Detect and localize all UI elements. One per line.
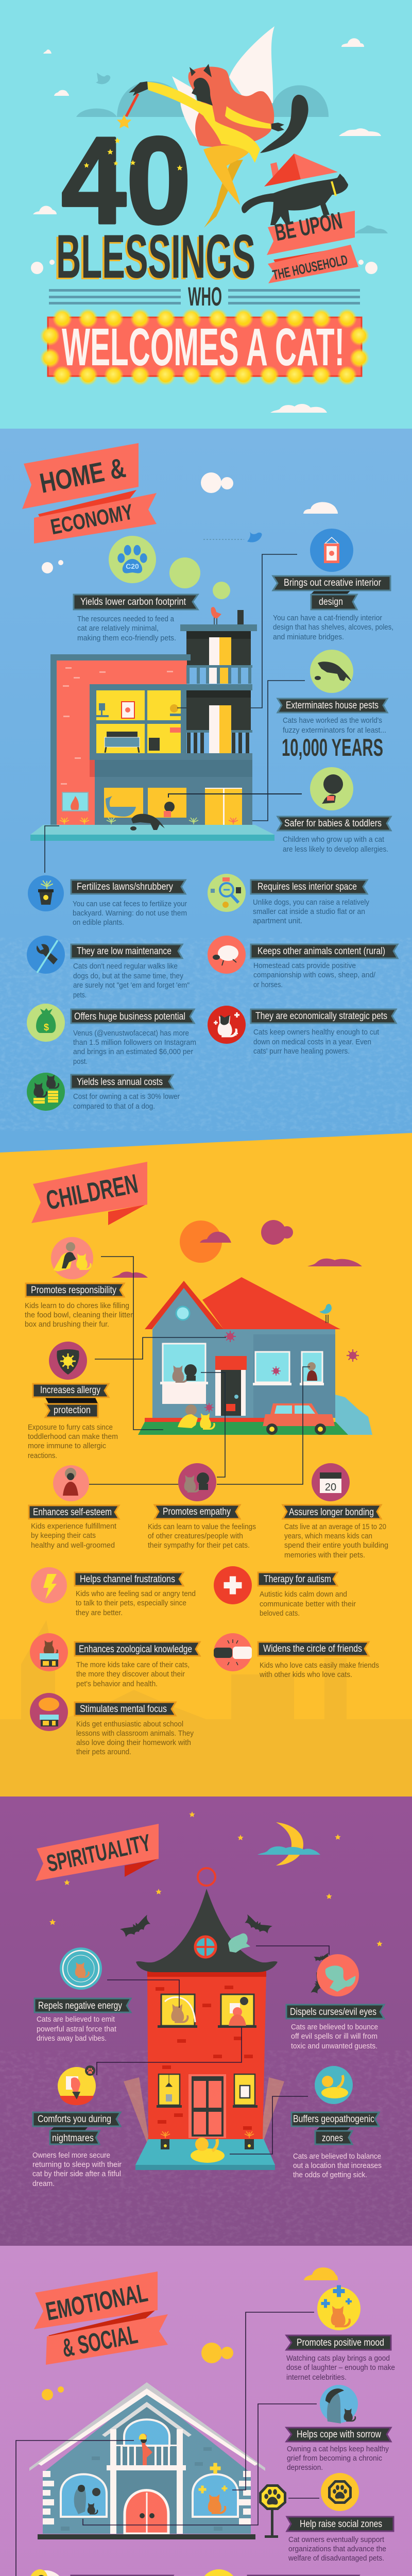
cloud <box>270 404 327 413</box>
label: Enhances zoological knowledge <box>79 1644 192 1655</box>
text: than 1.5 million followers on Instagram <box>73 1039 196 1047</box>
icon: cat on books <box>30 1633 68 1671</box>
item: negative energy <box>35 1947 131 2043</box>
item: other animals <box>208 936 398 989</box>
label <box>35 1998 131 2012</box>
text <box>73 962 190 999</box>
night sky <box>49 1811 383 1995</box>
text: also love doing their homework with <box>76 1739 191 1747</box>
text <box>287 2445 389 2472</box>
text: beloved cats. <box>260 1609 300 1618</box>
ribbon: be upon the household <box>267 207 358 283</box>
street sign <box>259 2484 286 2538</box>
item: longer bonding <box>283 1463 388 1560</box>
text: spend their entire youth building <box>284 1541 388 1550</box>
text: Autistic kids calm down and <box>260 1590 347 1599</box>
label: Comforts you during <box>38 2114 111 2125</box>
text: memories with their pets. <box>284 1551 365 1560</box>
label: Keeps other animals content (rural) <box>258 946 385 957</box>
text: Cat owners eventually support <box>288 2536 384 2544</box>
text <box>73 1093 180 1111</box>
label: Buffers geopathogenic <box>293 2114 374 2125</box>
marquee sign <box>40 309 369 385</box>
label: protection <box>54 1405 91 1416</box>
label: Assures longer bonding <box>289 1507 374 1518</box>
text: You can use cat feces to fertilize your <box>73 900 187 908</box>
text: off evil spells or ill will from <box>291 2032 377 2041</box>
text <box>260 1590 356 1618</box>
text <box>253 899 370 925</box>
item: autism <box>214 1566 356 1618</box>
text: Cats are believed to bounce <box>291 2023 378 2031</box>
item: geopathogenic <box>291 2066 382 2179</box>
text: Watching cats play brings a good <box>286 2354 390 2363</box>
text and stat <box>282 717 386 761</box>
text and stat: fuzzy exterminators for at least... <box>283 726 386 735</box>
label <box>71 1075 173 1089</box>
heading ribbon: ECONOMY <box>48 499 135 539</box>
item: self-esteem <box>29 1465 119 1550</box>
decorative blobs and clouds <box>42 472 338 599</box>
label <box>74 595 198 609</box>
text: Kids who are feeling sad or angry tend <box>76 1590 196 1598</box>
heading ribbon: EMOTIONAL <box>43 2278 150 2326</box>
text: they are better. <box>76 1609 123 1617</box>
sun and clouds <box>112 1220 362 1278</box>
text: apartment unit. <box>253 917 302 925</box>
icon: cat pouncing <box>310 650 353 693</box>
text: Cats don't need regular walks like <box>73 962 178 971</box>
icon: siamese cat <box>208 1006 246 1044</box>
text: toddlerhood can make them <box>28 1433 118 1441</box>
fairy cat <box>117 26 308 228</box>
label: Widens the circle of friends <box>263 1643 362 1654</box>
haunted house <box>124 1868 284 2170</box>
label: zones <box>322 2133 343 2144</box>
text: grief from becoming a chronic <box>287 2454 382 2463</box>
text <box>73 1029 196 1066</box>
label <box>75 1642 200 1656</box>
text: and brings in an estimated $6,000 per <box>73 1048 193 1056</box>
text: Cats are believed to emit <box>37 2015 115 2024</box>
label: Exterminates house pests <box>286 700 379 711</box>
WHO with rules: WHO <box>188 282 222 311</box>
label: Yields lower carbon footprint <box>80 597 186 607</box>
item: annual costs <box>27 1073 180 1111</box>
text: cats' purr have healing powers. <box>253 1047 350 1056</box>
icon: calendar 20: 20 <box>325 1482 336 1493</box>
icon: shield virus <box>49 1342 87 1380</box>
label <box>251 1009 396 1023</box>
label: Stimulates mental focus <box>80 1704 167 1715</box>
text: Cats are believed to balance <box>293 2153 381 2161</box>
text: are less likely to develop allergies. <box>283 845 388 854</box>
text: depression. <box>287 2464 323 2472</box>
text: The more kids take care of their cats, <box>76 1661 190 1669</box>
text: their sympathy for their pet cats. <box>148 1541 250 1550</box>
text: powerful astral force that <box>37 2025 116 2033</box>
item: business potential <box>27 1004 196 1066</box>
item: stress <box>200 2569 372 2576</box>
text <box>77 615 176 642</box>
text: internet celebrities. <box>286 2374 347 2382</box>
icon: lightning bolt <box>31 1567 67 1603</box>
blobs and cloud <box>42 2267 338 2400</box>
text: Venus (@venustwofacecat) has more <box>73 1029 189 1038</box>
icon: coins with cat and dog <box>27 1073 65 1111</box>
text <box>259 1662 379 1679</box>
item: positive mood <box>286 2285 395 2382</box>
label <box>33 1384 109 1417</box>
text: companionship with cows, sheep, and/ <box>253 971 376 979</box>
text: are surely not "get 'em and forget 'em" <box>73 981 190 990</box>
label: nightmares <box>52 2133 94 2144</box>
text: Children who grow up with a cat <box>283 836 384 844</box>
label: design <box>319 597 343 607</box>
icon: cat in rings <box>60 1947 102 1990</box>
label: They are economically strategic pets <box>255 1011 387 1022</box>
panel: spirituality <box>32 1811 384 2188</box>
text: box and brushing their fur. <box>25 1320 109 1329</box>
item: mental focus <box>30 1693 194 1756</box>
label: Offers huge business potential <box>74 1011 185 1022</box>
label <box>291 2112 379 2144</box>
heading ribbon <box>31 1162 147 1225</box>
text: communicate better with their <box>260 1600 356 1608</box>
connector lines <box>89 1257 310 1484</box>
label: Promotes responsibility <box>31 1285 116 1296</box>
label <box>273 576 390 609</box>
connector lines <box>45 554 305 873</box>
label: Help raise social zones <box>300 2519 382 2530</box>
item: low maintenance <box>27 936 190 999</box>
sky clouds <box>33 38 381 214</box>
icon: baby <box>310 767 353 810</box>
item: responsibility <box>25 1237 133 1329</box>
text: reactions. <box>28 1452 57 1460</box>
item: circle of friends <box>214 1633 379 1679</box>
text: toxic and unwanted guests. <box>291 2042 377 2050</box>
text: on edible plants. <box>73 919 124 927</box>
text <box>273 614 393 641</box>
white dots <box>31 260 377 274</box>
text <box>32 2151 122 2188</box>
text: Unlike dogs, you can raise a relatively <box>253 899 370 907</box>
item: curses <box>286 1954 384 2050</box>
text: pets. <box>73 991 87 999</box>
icon: medical cross <box>214 1566 252 1604</box>
label: Promotes empathy <box>163 1506 231 1517</box>
label: Dispels curses/evil eyes <box>290 2007 376 2018</box>
heading ribbon: & SOCIAL <box>60 2320 140 2363</box>
icon: girl and cat <box>51 1237 93 1279</box>
text: compared to that of a dog. <box>73 1103 155 1111</box>
text: Kids who love cats easily make friends <box>260 1662 379 1670</box>
text: drives away bad vibes. <box>37 2035 107 2043</box>
text: Cost for owning a cat is 30% lower <box>73 1093 180 1101</box>
text: the more they discover about their <box>76 1670 185 1679</box>
text: The resources needed to feed a <box>77 615 175 623</box>
text <box>37 2015 116 2043</box>
text: of other creatures/people with <box>148 1532 243 1540</box>
text: organizations that advance the <box>288 2545 386 2553</box>
icon: money bag <box>27 1004 65 1042</box>
text: or horses. <box>253 981 283 989</box>
label <box>286 2428 391 2442</box>
icon: kid with cat <box>178 1463 216 1501</box>
text: cat are relatively minimal, <box>77 624 159 633</box>
text <box>291 2023 378 2050</box>
item: babies and toddlers <box>278 767 391 854</box>
label <box>71 2575 173 2576</box>
label <box>258 1572 337 1586</box>
building <box>30 607 274 841</box>
house <box>138 1277 372 1435</box>
text <box>288 2536 386 2563</box>
text: Owners feel more secure <box>32 2151 110 2160</box>
text <box>76 1590 196 1617</box>
label: Increases allergy <box>40 1385 100 1396</box>
text <box>25 1302 133 1329</box>
label: Yields less annual costs <box>77 1077 163 1088</box>
text: Kids experience fulfillment <box>31 1522 116 1531</box>
magic stars <box>84 138 183 171</box>
label: Repels negative energy <box>38 2001 122 2011</box>
text and stat: Cats have worked as the world's <box>283 717 382 725</box>
panel: children <box>0 1162 412 1797</box>
icon: paw octagon <box>321 2473 359 2511</box>
text: more immune to allergic <box>28 1442 106 1450</box>
text: the odds of getting sick. <box>293 2171 367 2179</box>
item: empathy <box>148 1463 256 1550</box>
icon: calendar 20 <box>312 1463 350 1501</box>
text <box>253 962 376 989</box>
label: They are low maintenance <box>77 946 171 957</box>
text <box>28 1423 118 1460</box>
icon: picture frame <box>310 529 353 572</box>
text <box>76 1720 194 1756</box>
label <box>154 1505 240 1519</box>
text: dream. <box>32 2180 55 2188</box>
label <box>71 944 182 958</box>
text <box>253 1028 379 1056</box>
label <box>278 817 391 831</box>
text: You can have a cat-friendly interior <box>273 614 382 622</box>
text: Owning a cat helps keep healthy <box>287 2445 389 2453</box>
text: pet's behavior and health. <box>76 1680 158 1688</box>
label: Requires less interior space <box>258 882 357 892</box>
label: Brings out creative interior <box>284 578 382 588</box>
text: returning to sleep with their <box>32 2161 122 2169</box>
text <box>286 2354 395 2382</box>
text: smaller cat inside a studio flat or an <box>253 908 365 916</box>
icon: plant pot <box>28 875 64 911</box>
text: down on medical costs in a year. Even <box>253 1038 371 1046</box>
icon: woman holding cat <box>27 2569 65 2576</box>
icon: magnifier <box>208 874 246 912</box>
text: backyard. Warning: do not use them <box>73 909 187 918</box>
text: with other kids who love cats. <box>259 1671 352 1679</box>
item: lower carbon footprint <box>74 536 198 642</box>
label: Promotes positive mood <box>297 2337 384 2348</box>
label: Therapy for autism <box>264 1574 331 1585</box>
ribbon: be upon the household: BE UPON <box>272 207 345 246</box>
text <box>73 900 187 927</box>
icon: paw circle <box>109 536 156 583</box>
text: lessons with classroom animals. They <box>76 1730 194 1738</box>
title BLESSINGS <box>54 222 255 293</box>
item: sorrow <box>286 2385 391 2472</box>
heading ribbon <box>34 2272 168 2365</box>
item: creative interior design <box>273 529 393 641</box>
text: to talk to their pets, especially since <box>76 1599 186 1607</box>
text: and miniature bridges. <box>273 633 344 641</box>
text: Homestead cats provide positive <box>253 962 356 970</box>
item: less interior space <box>208 874 370 925</box>
text: making them eco-friendly pets. <box>77 634 176 642</box>
label <box>278 699 387 713</box>
text <box>284 1523 388 1560</box>
label <box>251 944 398 958</box>
label: Safer for babies & toddlers <box>284 818 382 829</box>
text: the food bowl, cleaning their litter <box>25 1311 133 1319</box>
label: Helps cope with sorrow <box>297 2429 381 2440</box>
heading ribbon <box>36 1824 159 1881</box>
label: Enhances self-esteem <box>33 1507 112 1518</box>
house <box>29 2382 265 2539</box>
icon: woman with cat <box>320 2385 358 2424</box>
text: cat by their side after a fitful <box>32 2170 121 2178</box>
icon: fist bump <box>214 1633 252 1671</box>
label <box>258 1642 369 1656</box>
item: economically strategic <box>208 1006 396 1056</box>
roof and cat <box>242 154 348 225</box>
title BLESSINGS: BLESSINGS <box>56 222 255 291</box>
text: design that has shelves, alcoves, poles, <box>273 623 393 632</box>
icon: sleeper with cat <box>58 2065 96 2105</box>
title number 40: 40 <box>61 111 191 249</box>
ribbon: be upon the household: THE HOUSEHOLD <box>271 252 349 283</box>
label: Helps channel frustrations <box>80 1574 175 1585</box>
text: Exposure to furry cats since <box>28 1423 113 1432</box>
item: social zones <box>287 2473 393 2563</box>
heading ribbon: CHILDREN <box>44 1169 141 1216</box>
item: allergy protection <box>28 1342 118 1460</box>
text: Kids learn to do chores like filling <box>25 1302 129 1310</box>
icon: brain on books <box>30 1693 68 1731</box>
label <box>286 2005 384 2019</box>
text <box>283 836 388 854</box>
panel: emotional and social <box>16 2267 395 2576</box>
connector lines <box>16 2312 319 2576</box>
label <box>283 1505 381 1519</box>
item: fertilizes lawns <box>28 875 187 927</box>
heading ribbon: HOME & <box>37 452 128 499</box>
text <box>148 1523 256 1550</box>
label <box>248 2575 359 2576</box>
text: healthy and well-groomed <box>31 1541 115 1550</box>
icon: happy cat <box>317 2285 360 2330</box>
heading ribbon: SPIRITUALITY <box>44 1829 153 1877</box>
item: nightmares <box>32 2065 122 2188</box>
label <box>287 2517 393 2531</box>
text: dogs do, but at the same time, they <box>73 972 184 980</box>
text: by keeping their cats <box>31 1532 96 1540</box>
icon: crossed wrench <box>27 936 65 974</box>
label <box>286 2335 391 2350</box>
label <box>251 880 367 894</box>
text <box>31 1522 116 1550</box>
item: house pests <box>278 650 387 761</box>
text <box>293 2153 382 2179</box>
text: post. <box>73 1058 88 1066</box>
connector lines <box>97 1946 329 2154</box>
text: years, which means kids can <box>284 1532 372 1540</box>
text: Kids can learn to value the feelings <box>148 1523 256 1531</box>
item: frustrations <box>31 1567 196 1617</box>
label <box>33 2112 121 2144</box>
text: Cats live at an average of 15 to 20 <box>284 1523 386 1531</box>
icon: horseshoe with bolt <box>200 2569 238 2576</box>
icon: paw circle: C20 <box>126 562 139 570</box>
icon: money bag: $ <box>44 1022 49 1032</box>
title BLESSINGS: BLESSINGS <box>54 224 254 293</box>
text: their pets around. <box>76 1748 131 1756</box>
background hills <box>76 73 388 233</box>
text <box>76 1661 190 1688</box>
item: companionship <box>27 2569 189 2576</box>
panel: home and economy <box>22 443 398 1111</box>
skyline texture <box>0 1620 412 1797</box>
text: welfare of disadvantaged pets. <box>288 2554 384 2563</box>
icon: ghost cat <box>317 1954 359 1996</box>
heading ribbon <box>22 443 157 544</box>
icon: sheep <box>208 936 246 974</box>
text: dose of laughter – enough to make <box>286 2364 395 2372</box>
text: out a location that increases <box>293 2162 382 2170</box>
label: Fertilizes lawns/shrubbery <box>77 882 173 892</box>
panel: header <box>31 26 388 413</box>
icon: glowing cat <box>315 2066 353 2104</box>
text: Kids get enthusiastic about school <box>76 1720 183 1728</box>
WHO with rules <box>49 282 360 311</box>
icon: kid <box>53 1465 89 1501</box>
text: Cats keep owners healthy enough to cut <box>253 1028 379 1037</box>
item: zoological knowledge <box>30 1633 200 1688</box>
